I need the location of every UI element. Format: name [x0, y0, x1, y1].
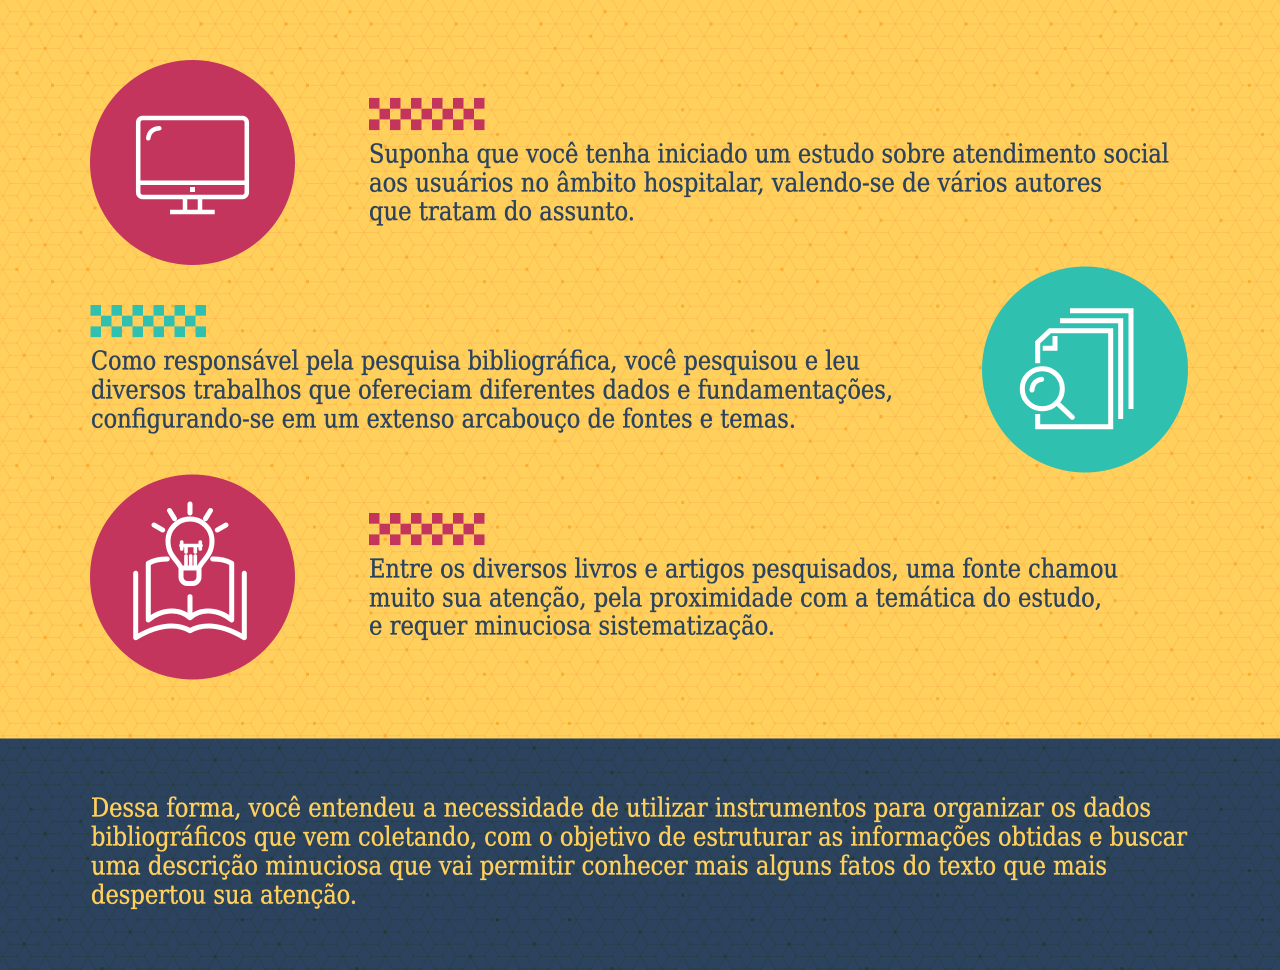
- checker accent: [369, 98, 484, 130]
- text block: step 1: Suponha que você tenha iniciado um estudo sobre atendimento social: [369, 139, 1169, 169]
- icon: open book with light bulb in crimson circle: [90, 474, 295, 680]
- text block: conclusion: Dessa forma, você entendeu a necessidade de utilizar instrumentos para organizar os dados: [91, 793, 1151, 823]
- background: yellow patterned upper panel: [0, 0, 1280, 738]
- text block: conclusion: [91, 793, 1188, 910]
- panel: step 2 documents: [90, 266, 1188, 472]
- text block: step 2: configurando-se em um extenso arcabouço de fontes e temas.: [91, 404, 796, 434]
- text block: step 2: diversos trabalhos que ofereciam diferentes dados e fundamentações,: [91, 375, 893, 405]
- text block: step 1: [369, 139, 1169, 227]
- checker accent: [90, 305, 206, 337]
- text block: step 1: que tratam do assunto.: [369, 197, 635, 227]
- text block: step 2: Como responsável pela pesquisa bibliográfica, você pesquisou e leu: [91, 346, 860, 376]
- text block: step 2: [91, 346, 893, 434]
- text block: step 3: [369, 554, 1118, 641]
- text block: step 3: e requer minuciosa sistematização.: [369, 611, 775, 641]
- panel: step 3 book and idea: [90, 474, 1118, 680]
- icon: computer monitor in crimson circle: [90, 60, 295, 265]
- text block: conclusion: uma descrição minuciosa que vai permitir conhecer mais alguns fatos do texto que mais: [91, 851, 1107, 881]
- text block: conclusion: despertou sua atenção.: [91, 880, 357, 910]
- panel: step 1 computer: [90, 60, 1169, 265]
- text block: step 3: Entre os diversos livros e artigos pesquisados, uma fonte chamou: [369, 554, 1118, 584]
- background: navy patterned lower panel: [0, 738, 1280, 970]
- text block: conclusion: bibliográficos que vem coletando, com o objetivo de estruturar as informações obtidas e buscar: [91, 822, 1188, 852]
- icon: documents with magnifier in teal circle: [982, 266, 1188, 472]
- text block: step 1: aos usuários no âmbito hospitalar, valendo-se de vários autores: [369, 168, 1102, 198]
- text block: step 3: muito sua atenção, pela proximidade com a temática do estudo,: [369, 583, 1102, 613]
- checker accent: [369, 513, 484, 545]
